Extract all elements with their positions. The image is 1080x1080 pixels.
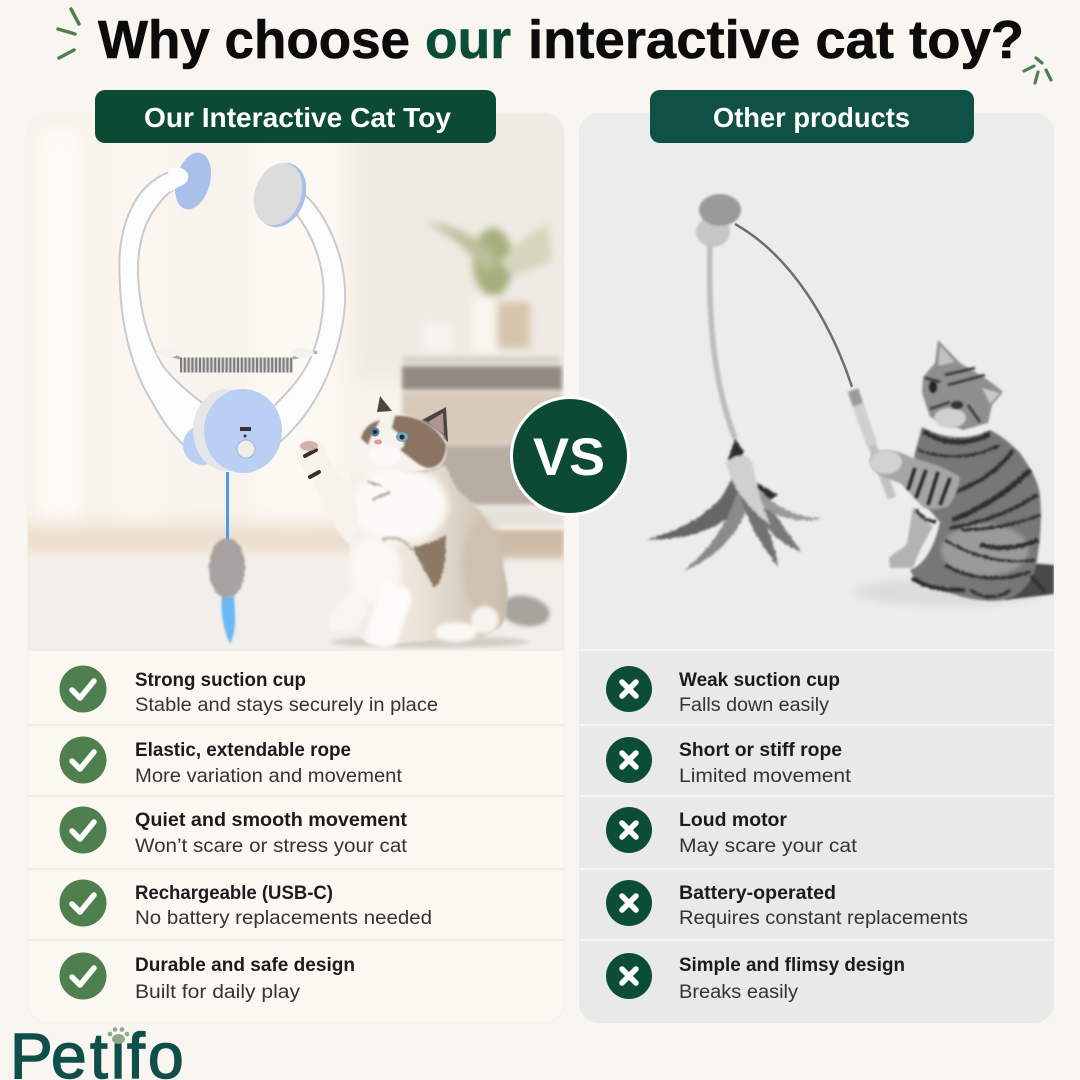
row: quiet movement: Won’t scare or stress your cat	[135, 836, 408, 857]
cat eyes	[370, 428, 380, 436]
row: loud motor: May scare your cat	[679, 836, 858, 857]
row: flimsy design	[606, 953, 905, 1003]
toy arm left	[119, 168, 205, 447]
row: weak suction cup	[606, 666, 840, 716]
heading: our interactive cat toy	[95, 90, 496, 143]
row: strong suction cup: Stable and stays securely in place	[135, 695, 438, 716]
row: battery operated: Battery-operated	[679, 883, 836, 904]
cat fur markings	[366, 480, 448, 588]
cat head	[399, 414, 448, 472]
row: flimsy design: Simple and flimsy design	[679, 955, 905, 976]
tabby stripes	[912, 432, 1045, 597]
row: weak suction cup: Weak suction cup	[679, 670, 840, 691]
grey fur ball	[209, 538, 245, 598]
row: quiet movement	[60, 806, 408, 857]
blurred shelf	[400, 356, 564, 574]
other toy feathers	[645, 438, 822, 571]
row: battery operated: Requires constant replacements	[679, 908, 968, 929]
icon: other toy suction cups	[696, 194, 741, 247]
comparison list: our toy	[28, 650, 564, 1003]
row: rechargeable	[60, 880, 432, 929]
cat front leg	[889, 507, 933, 568]
cat body	[350, 465, 510, 644]
comparison list: other products	[579, 650, 1054, 1003]
cat hip	[941, 524, 1029, 576]
toy arm right	[272, 195, 345, 442]
row: weak suction cup: Falls down easily	[679, 695, 830, 716]
row: elastic rope	[60, 736, 403, 787]
other toy handle	[853, 390, 892, 498]
panel: our interactive cat toy	[10, 100, 580, 1023]
cat muzzle	[398, 450, 401, 452]
row: loud motor	[606, 807, 858, 857]
photo: ragdoll cat	[297, 396, 552, 648]
row: flimsy design: Breaks easily	[679, 982, 799, 1003]
heading: other products: Other products	[713, 102, 910, 133]
vs badge: VS	[533, 428, 605, 487]
row: quiet movement: Quiet and smooth movement	[135, 810, 408, 831]
row: strong suction cup	[60, 666, 438, 716]
heading: our interactive cat toy: Our Interactive Cat Toy	[144, 102, 451, 133]
row: battery operated	[606, 880, 968, 929]
product photo	[10, 100, 580, 658]
feather tail	[221, 596, 235, 644]
cat nose	[374, 440, 382, 444]
icon: interactive toy	[119, 149, 345, 644]
motor housing	[183, 389, 282, 473]
cat shadow	[858, 580, 1034, 606]
row: durable design	[60, 952, 355, 1003]
row: durable design: Durable and safe design	[135, 955, 355, 976]
row: short rope	[606, 737, 852, 787]
product photo: other toy	[646, 193, 1054, 604]
cat body	[910, 427, 1041, 601]
cat tail	[1005, 564, 1054, 600]
other toy stiff rod	[710, 245, 735, 438]
row: short rope: Short or stiff rope	[679, 740, 842, 761]
row: elastic rope: More variation and movement	[135, 766, 403, 787]
row: elastic rope: Elastic, extendable rope	[135, 740, 351, 761]
vs badge	[512, 398, 628, 514]
title: our	[425, 10, 511, 70]
row: strong suction cup: Strong suction cup	[135, 670, 306, 691]
panel: other products	[579, 113, 1054, 1023]
icon: paw	[108, 1027, 129, 1044]
row: rechargeable: Rechargeable (USB-C)	[135, 883, 333, 904]
title: Why choose	[98, 10, 410, 70]
title: interactive cat toy?	[528, 10, 1024, 70]
cat eyes	[929, 381, 937, 393]
cat ears	[377, 396, 392, 412]
rope	[226, 472, 229, 542]
icon: sparkle top left	[58, 9, 79, 58]
cat legs	[356, 584, 501, 648]
suction cup right	[254, 162, 306, 228]
spring	[156, 348, 317, 365]
blurred plant and pots	[423, 222, 552, 353]
icon: sparkle top right	[1024, 58, 1051, 83]
cat tail	[504, 593, 552, 629]
other toy wire	[735, 224, 852, 387]
cat raised arm	[333, 491, 356, 544]
row: short rope: Limited movement	[679, 766, 852, 787]
suction cup left	[168, 152, 211, 210]
cat head	[922, 340, 1003, 430]
row: loud motor: Loud motor	[679, 810, 788, 831]
row: rechargeable: No battery replacements needed	[135, 908, 432, 929]
heading: other products	[650, 90, 974, 143]
cat raised arm	[870, 450, 960, 509]
photo: tabby cat	[870, 340, 1054, 601]
row: durable design: Built for daily play	[135, 982, 301, 1003]
